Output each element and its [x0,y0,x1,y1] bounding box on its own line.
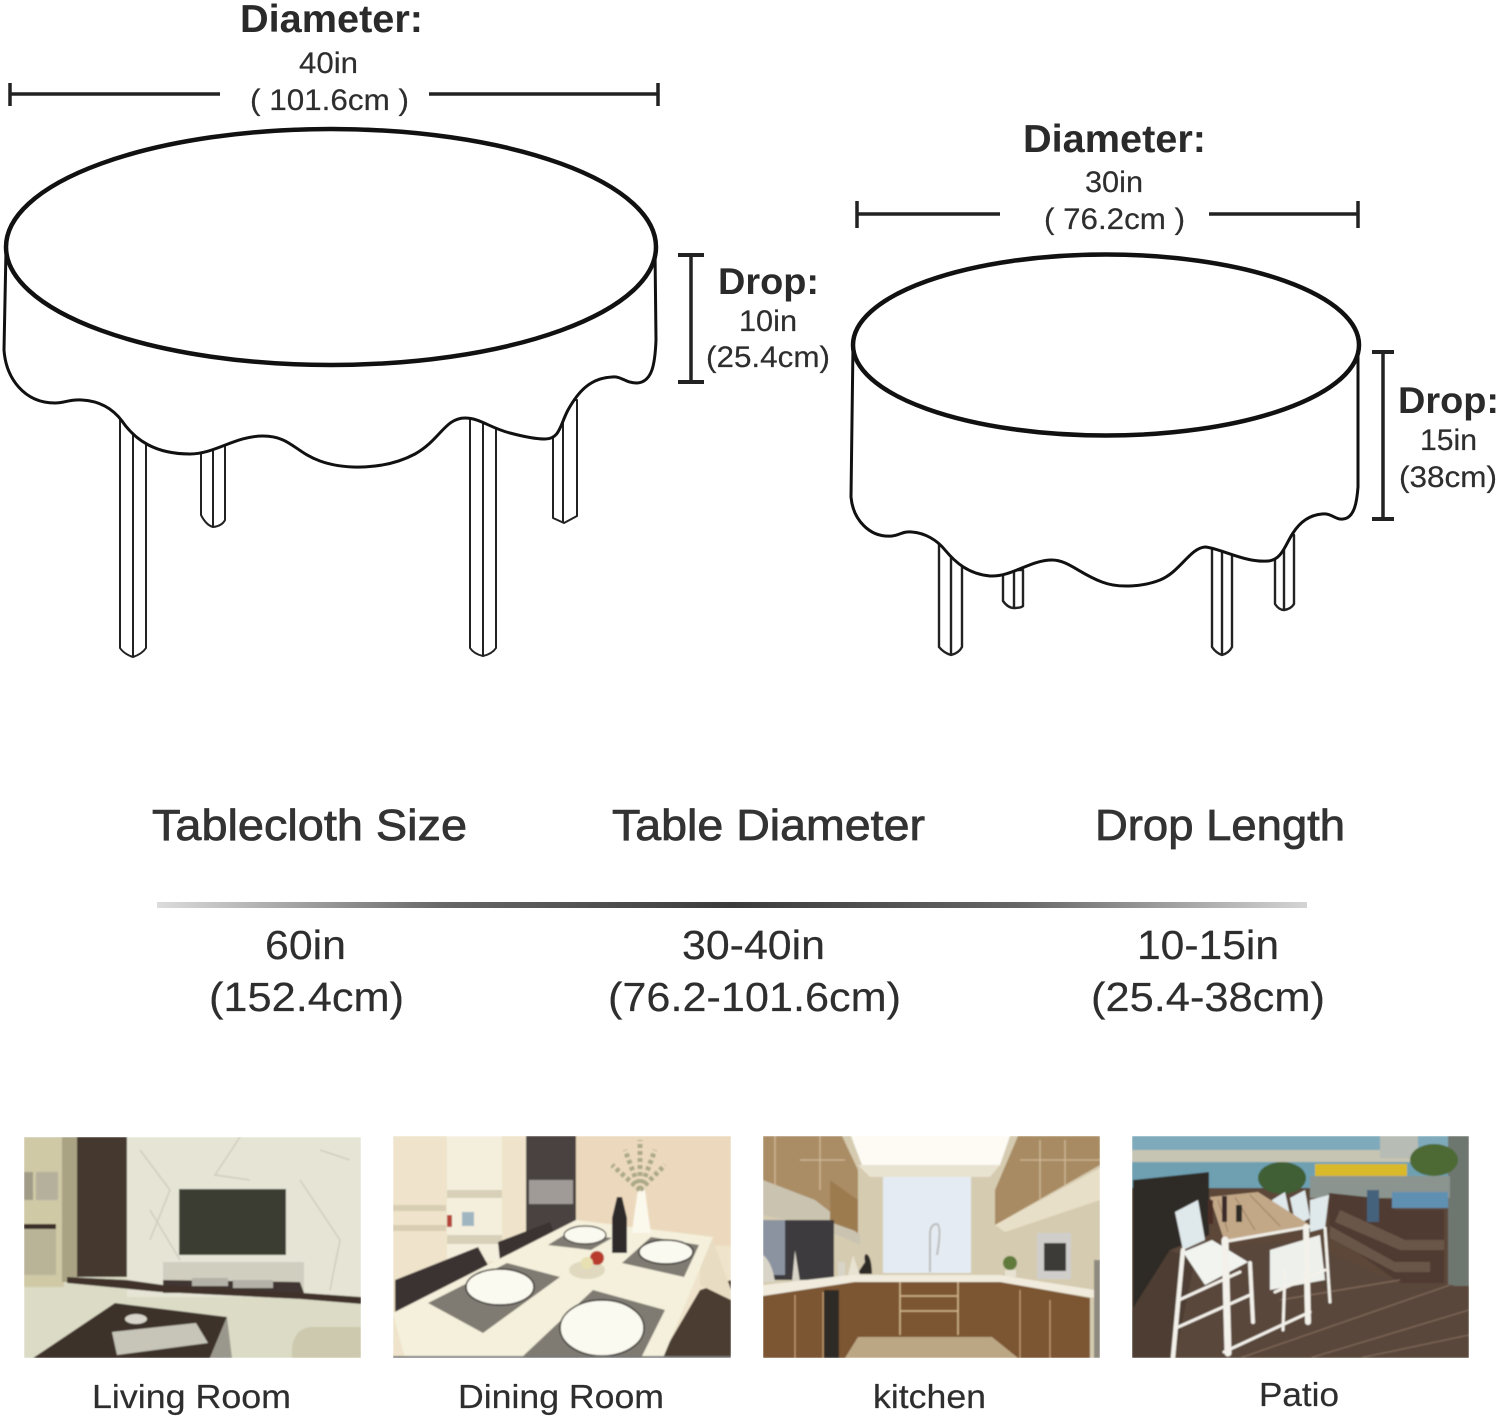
value: drop length: (25.4-38cm) [1091,974,1325,1020]
caption: living room: Living Room [92,1378,291,1415]
photo: kitchen [763,1136,1100,1358]
value: drop length: 10-15in [1137,922,1279,968]
value: tablecloth size: 60in [265,922,346,968]
icon: small tablecloth skirt [851,345,1358,586]
caption: kitchen: kitchen [873,1378,986,1415]
text: 101.6cm: ( 101.6cm ) [250,84,409,117]
text: 76.2cm: ( 76.2cm ) [1044,203,1185,236]
heading: drop small: Drop: [1398,380,1499,421]
value: tablecloth size: (152.4cm) [209,974,404,1020]
heading: table diameter: Table Diameter [612,801,925,850]
panel: small table diagram [851,118,1499,655]
text: 10in: 10in [739,305,797,338]
divider gradient rule [157,902,1307,908]
heading: diameter small: Diameter: [1023,118,1206,161]
panel: size table [152,801,1345,1020]
text: 30in: 30in [1085,166,1143,199]
text: 15in: 15in [1420,424,1477,457]
photo: patio [1132,1136,1469,1358]
heading: drop large: Drop: [718,261,819,302]
text: 38cm: (38cm) [1399,461,1497,494]
icon: small table legs [939,535,1294,655]
value: drop length [1091,922,1325,1020]
heading: drop length: Drop Length [1095,801,1345,850]
drop dimension bracket, large table [678,255,704,382]
value: table diameter: 30-40in [682,922,825,968]
drop dimension bracket, small table [1372,352,1394,519]
diameter dimension arrow, small table [857,201,1358,228]
panel: large table diagram [4,0,830,657]
icon: large table legs [120,400,577,657]
photo: living room [24,1137,361,1358]
photo: dining room [393,1136,731,1358]
icon: small table top ellipse [853,254,1359,436]
text: 25.4cm: (25.4cm) [706,341,830,374]
text: 40in: 40in [299,47,358,80]
value: table diameter: (76.2-101.6cm) [608,974,901,1020]
icon: large tablecloth skirt [4,250,656,467]
icon: large table top ellipse [6,129,656,365]
caption: patio: Patio [1259,1376,1339,1413]
heading: tablecloth size: Tablecloth Size [152,801,467,850]
value: tablecloth size [209,922,404,1020]
diameter dimension arrow, large table [10,83,658,106]
caption: dining room: Dining Room [458,1378,664,1415]
value: table diameter [608,922,901,1020]
